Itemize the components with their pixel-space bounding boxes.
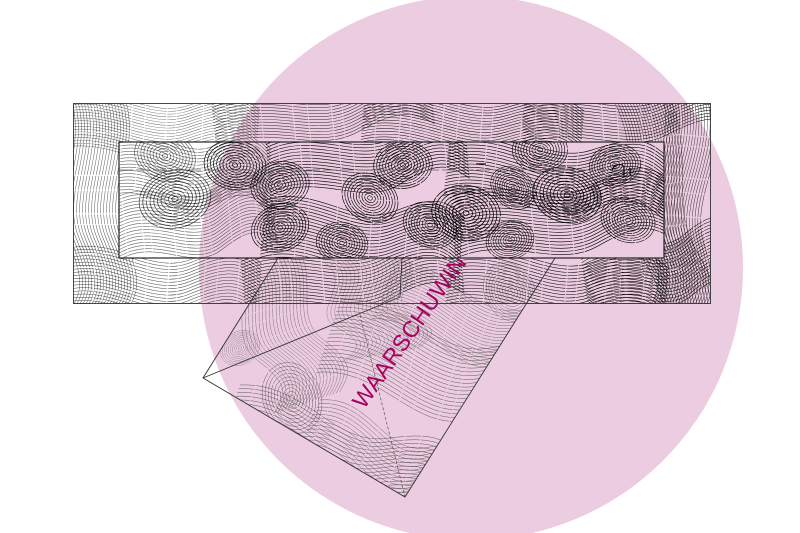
inner panel border — [119, 142, 664, 258]
inner panel texture: dense vortices — [120, 142, 664, 258]
envelope flow texture — [220, 258, 536, 496]
pink circle — [199, 0, 743, 533]
outer border texture of the letterbox plate — [73, 103, 711, 304]
slot line — [119, 170, 640, 171]
envelope outline and flap — [203, 258, 555, 497]
letterbox plate: swirling line texture — [73, 103, 711, 304]
slot hook detail — [476, 164, 630, 176]
plate border — [74, 104, 710, 304]
warning text on envelope: WAARSCHUWING — [347, 235, 482, 413]
envelope: warning letter — [202, 258, 556, 498]
envelope fold line — [360, 315, 405, 497]
